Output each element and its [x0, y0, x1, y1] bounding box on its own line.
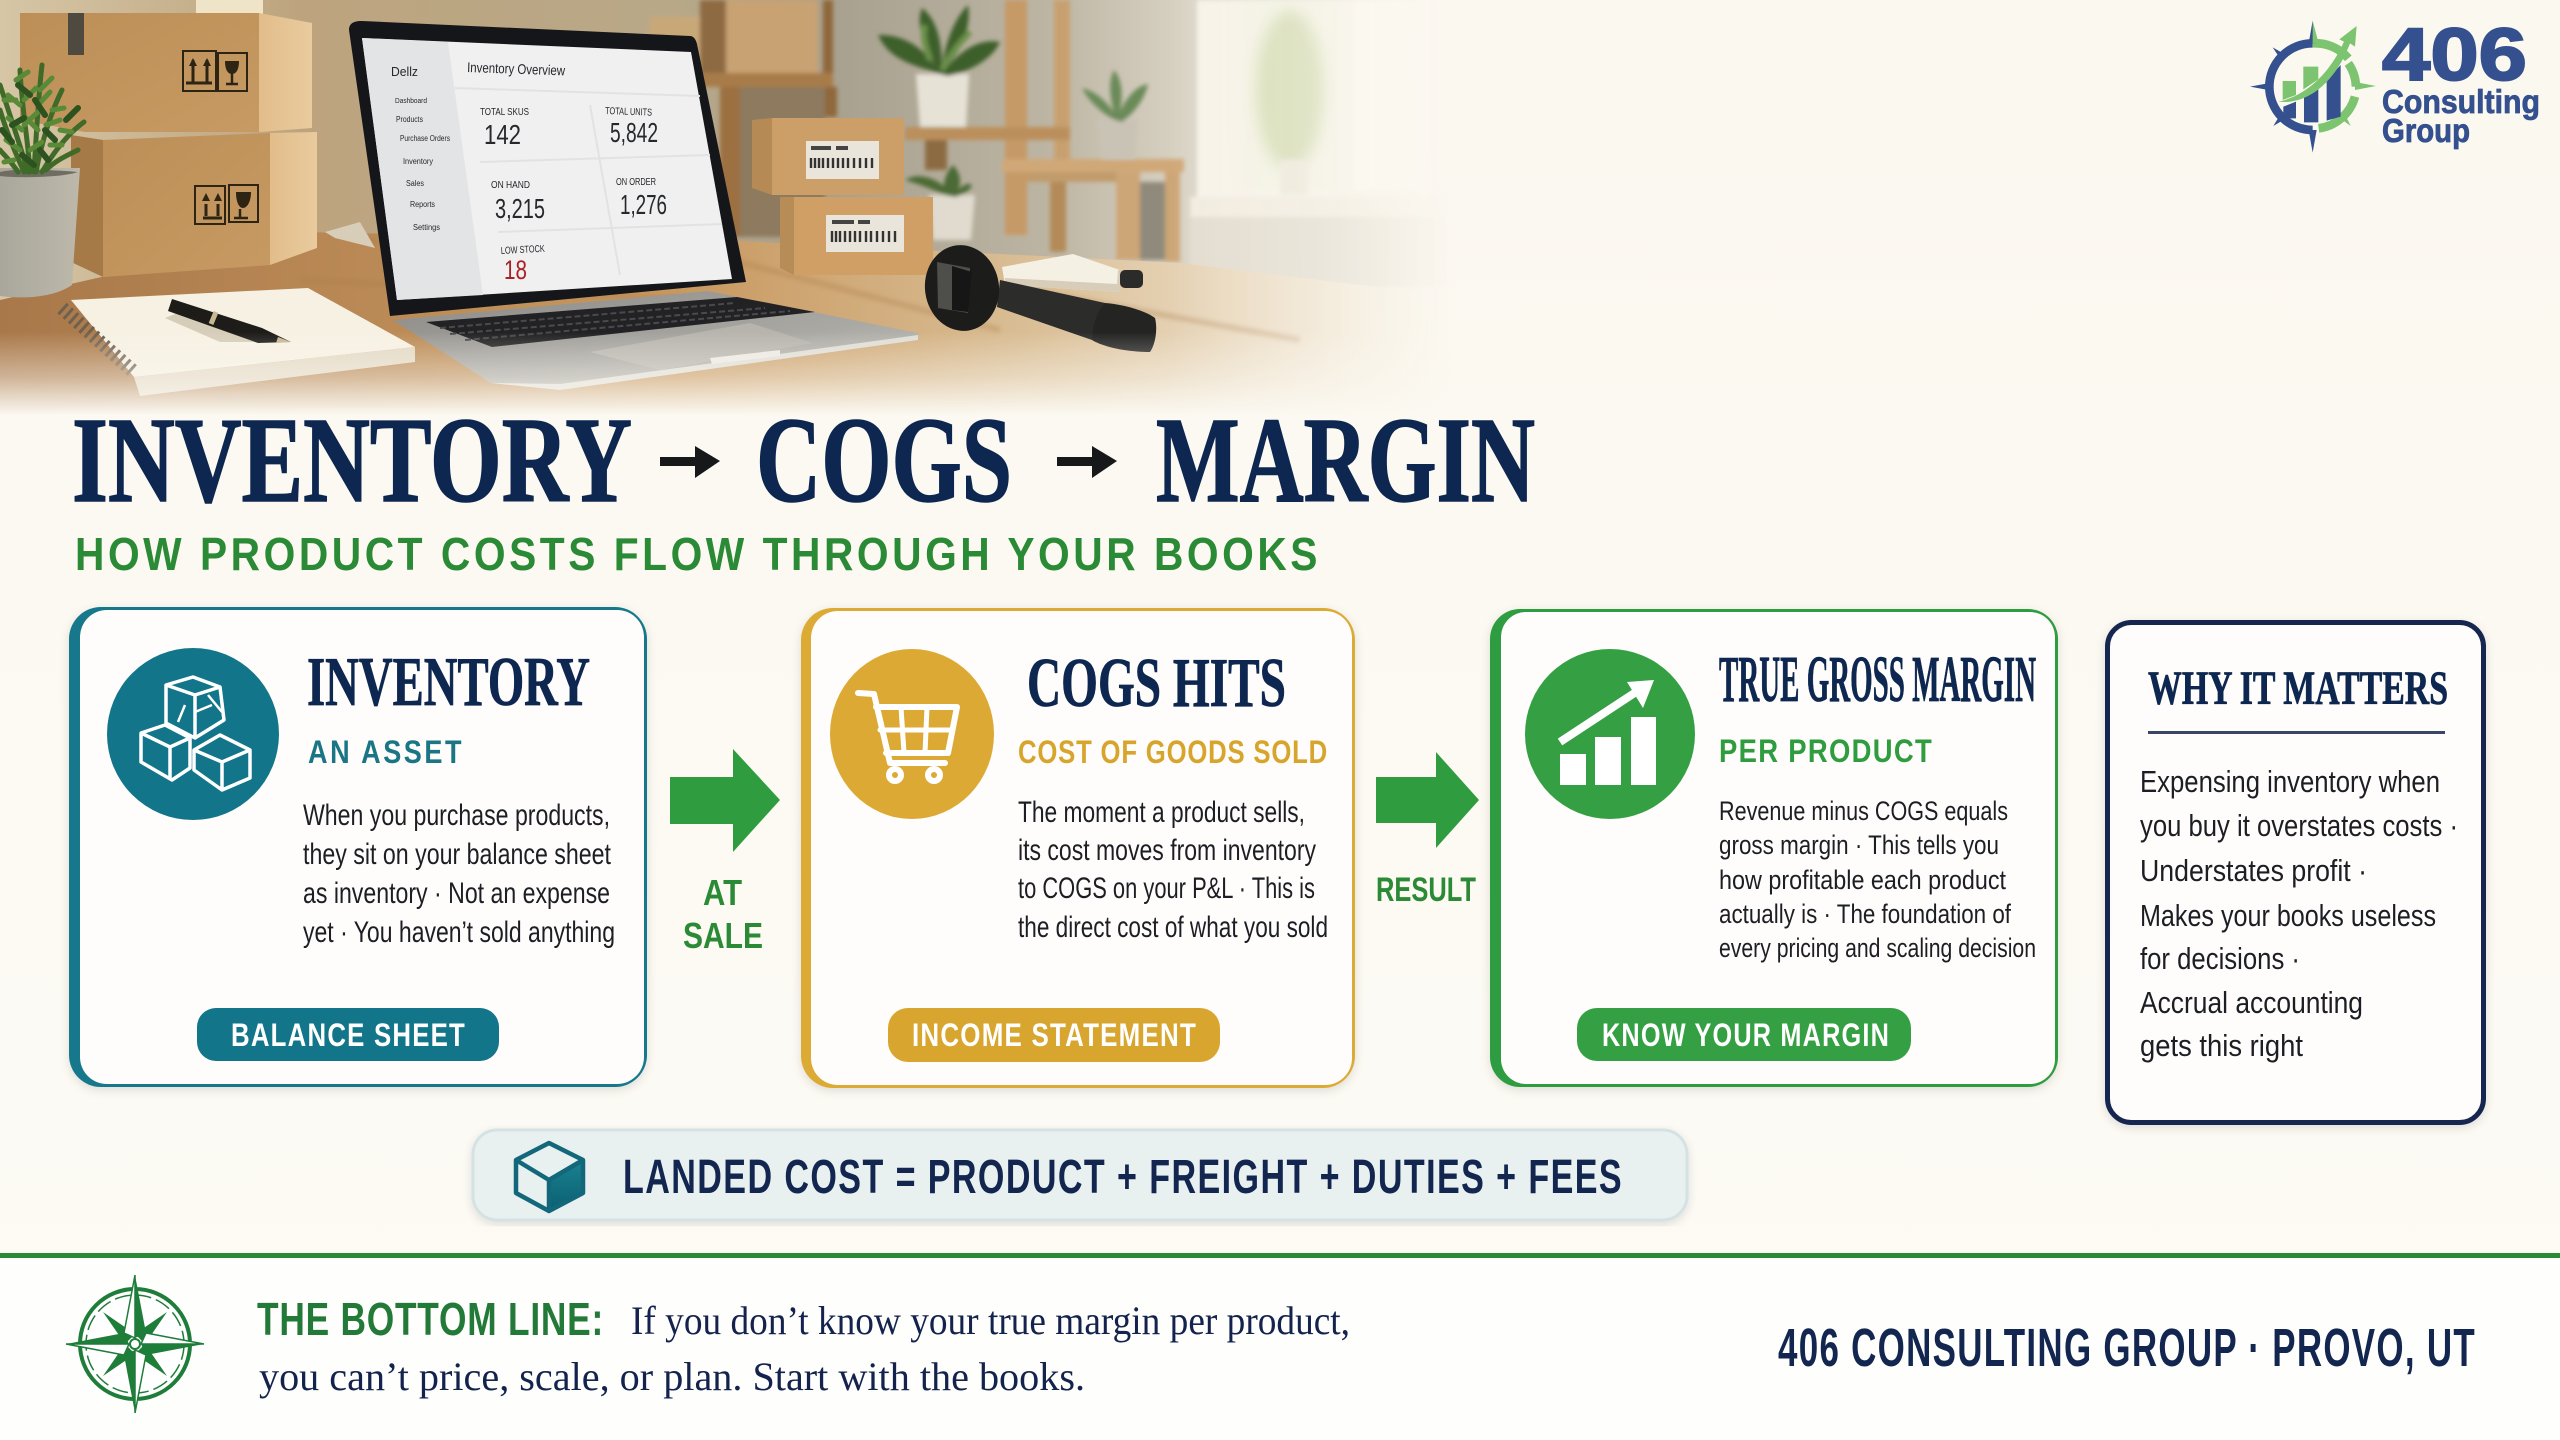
- footer band: [0, 1253, 2560, 1440]
- icon: stacked boxes: [107, 648, 279, 820]
- logo wordmark: Group: [2382, 112, 2470, 149]
- bottom line message: THE BOTTOM LINE:: [257, 1293, 604, 1345]
- laptop base: [393, 291, 918, 390]
- dashboard text: Inventory Overview: [467, 59, 566, 78]
- small book behind laptop: [325, 222, 375, 248]
- arrow: result: [1376, 752, 1479, 909]
- spiral notebook with pen: [62, 288, 415, 396]
- body text: When you purchase products,: [303, 799, 610, 832]
- logo wordmark: [2382, 13, 2540, 149]
- subheading: COST OF GOODS SOLD: [1018, 734, 1328, 770]
- table surface: [0, 232, 1389, 412]
- body text: every pricing and scaling decision: [1719, 933, 2036, 963]
- body text: how profitable each product: [1719, 865, 2006, 895]
- body text: its cost moves from inventory: [1018, 834, 1316, 867]
- bottom line message: If you don’t know your true margin per product,: [631, 1298, 1350, 1343]
- laptop lid and screen: [349, 21, 746, 316]
- dashboard text: 3,215: [495, 193, 545, 224]
- dashboard text: TOTAL SKUS: [480, 107, 529, 118]
- arrow: at sale: SALE: [683, 915, 763, 956]
- pill: know your margin: KNOW YOUR MARGIN: [1602, 1017, 1890, 1053]
- body text: Expensing inventory when: [2140, 764, 2440, 799]
- pill: balance sheet: [197, 1008, 499, 1061]
- body text: you buy it overstates costs ·: [2140, 808, 2458, 843]
- wall and shelves backdrop: [0, 0, 1309, 300]
- icon: shopping cart: [830, 649, 994, 819]
- dashboard text: LOW STOCK: [501, 244, 545, 257]
- dashboard text: Dashboard: [395, 98, 427, 105]
- body text: they sit on your balance sheet: [303, 838, 612, 871]
- bottom line message: [257, 1293, 1350, 1399]
- landed cost formula bar: [473, 1130, 1687, 1220]
- body text: to COGS on your P&L · This is: [1018, 872, 1315, 905]
- handling symbols: [183, 51, 258, 224]
- main title: MARGIN: [1156, 393, 1535, 528]
- body text: [1719, 796, 2036, 963]
- main title: COGS: [756, 393, 1012, 528]
- subheading: AN ASSET: [308, 734, 464, 770]
- dashboard text: Settings: [413, 223, 440, 232]
- body text: gross margin · This tells you: [1719, 830, 1999, 860]
- arrow: result: RESULT: [1376, 871, 1476, 909]
- body text: [303, 799, 615, 949]
- potted plant left: [0, 65, 84, 297]
- subheading: PER PRODUCT: [1719, 733, 1933, 769]
- body text: The moment a product sells,: [1018, 796, 1305, 829]
- logo wordmark: Consulting: [2382, 83, 2540, 120]
- body text: actually is · The foundation of: [1719, 899, 2011, 929]
- dashboard text: TOTAL UNITS: [605, 106, 652, 119]
- heading: INVENTORY: [307, 644, 590, 721]
- panel: cogs: [801, 608, 1355, 1088]
- stacked boxes left: [20, 13, 317, 277]
- logo wordmark: 406: [2382, 13, 2527, 96]
- dashboard text: Products: [396, 115, 423, 124]
- panel: true gross margin: [1490, 609, 2058, 1087]
- potted plants on shelves: [878, 5, 1148, 240]
- pill: income statement: [888, 1008, 1220, 1062]
- dashboard text: ON ORDER: [616, 177, 656, 188]
- body text: Understates profit ·: [2140, 853, 2367, 888]
- dashboard text: Inventory: [403, 157, 433, 166]
- dashboard text: Purchase Orders: [400, 134, 450, 143]
- panel: why it matters: [2108, 622, 2484, 1122]
- dashboard text: Reports: [410, 200, 435, 209]
- body text: [1018, 796, 1328, 944]
- barcode labels: [806, 141, 879, 179]
- laptop: [349, 21, 918, 390]
- body text: the direct cost of what you sold: [1018, 911, 1328, 944]
- bottom line message: you can’t price, scale, or plan. Start with the books.: [259, 1354, 1085, 1399]
- body text: Makes your books useless: [2140, 898, 2436, 933]
- center shipping boxes: [752, 118, 933, 275]
- book and barcode scanner: [919, 240, 1156, 352]
- body text: [2140, 764, 2458, 1063]
- dashboard text: 1,276: [620, 189, 667, 220]
- landed cost formula bar: LANDED COST = PRODUCT + FREIGHT + DUTIES + FEES: [623, 1151, 1623, 1204]
- infographic canvas: TRUE GROSS MARGIN: [1719, 643, 2036, 716]
- body text: as inventory · Not an expense: [303, 877, 610, 910]
- logo: 406 Consulting Group: [2250, 13, 2540, 153]
- panel: inventory: [69, 607, 647, 1087]
- body text: Accrual accounting: [2140, 985, 2363, 1020]
- body text: Revenue minus COGS equals: [1719, 796, 2008, 826]
- icon: package: [516, 1143, 583, 1211]
- dashboard text: 142: [484, 119, 521, 150]
- pill: know your margin: [1577, 1008, 1911, 1061]
- dashboard text: ON HAND: [491, 180, 530, 191]
- body text: for decisions ·: [2140, 941, 2300, 976]
- pill: balance sheet: BALANCE SHEET: [231, 1017, 466, 1053]
- logo emblem: [2250, 21, 2376, 153]
- arrow: inventory to cogs: [660, 446, 720, 478]
- main title: [72, 393, 1535, 528]
- icon: compass rose: [66, 1275, 204, 1413]
- hero photo: laptop on desk with boxes: [0, 0, 1517, 420]
- dashboard text: 18: [504, 255, 527, 285]
- arrow: at sale: AT: [703, 872, 742, 913]
- dashboard text: 5,842: [610, 117, 658, 148]
- body text: gets this right: [2140, 1028, 2303, 1063]
- pill: income statement: INCOME STATEMENT: [912, 1017, 1197, 1053]
- main title: INVENTORY: [72, 393, 632, 528]
- arrow: cogs to margin: [1057, 446, 1117, 478]
- window: [1189, 0, 1371, 264]
- subtitle: HOW PRODUCT COSTS FLOW THROUGH YOUR BOOKS: [75, 528, 1321, 580]
- body text: yet · You haven’t sold anything: [303, 916, 615, 949]
- icon: growth chart: [1525, 649, 1695, 819]
- dashboard text: [391, 59, 667, 285]
- dashboard text: Sales: [406, 179, 424, 188]
- dashboard text: Dellz: [391, 64, 418, 79]
- arrow: at sale: [670, 749, 780, 956]
- heading: COGS HITS: [1027, 645, 1286, 722]
